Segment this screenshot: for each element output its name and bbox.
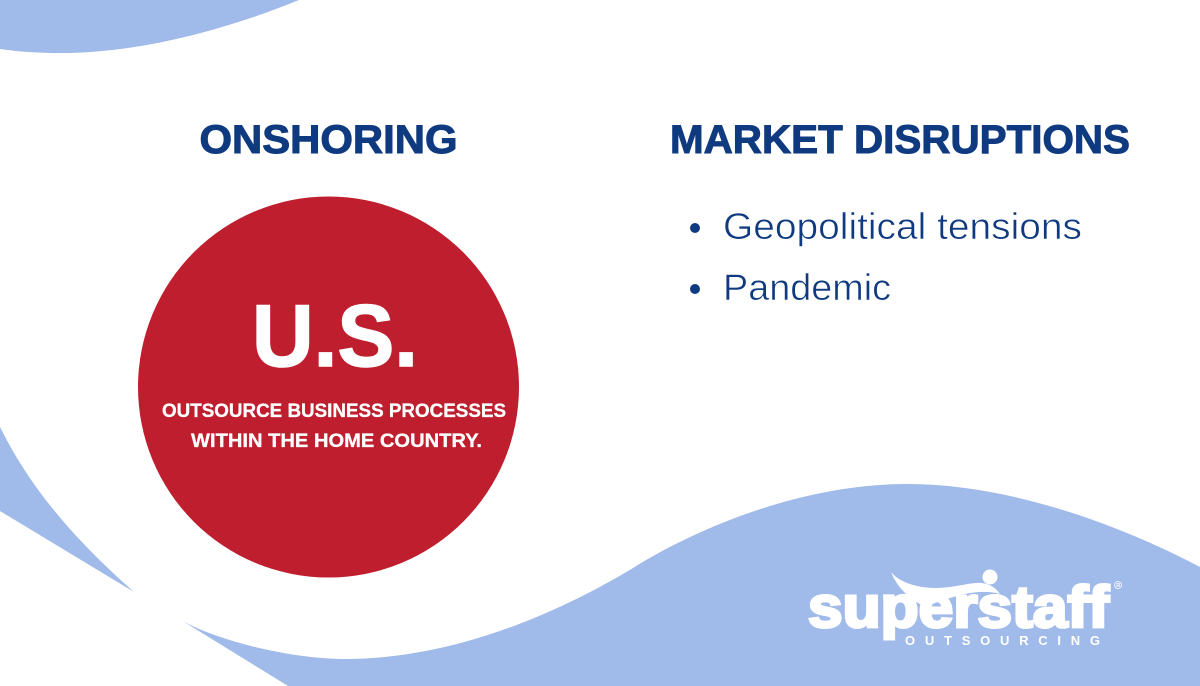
heading: onshoring: ONSHORING [200,118,458,162]
logo: superstaff outsourcing [808,570,1122,648]
bullet item: geopolitical tensions: Geopolitical tensions [723,206,1082,247]
logo registered mark: R [1116,583,1120,589]
circle text line 2: WITHIN THE HOME COUNTRY. [191,430,482,452]
bullet list: market disruptions [690,206,1082,308]
logo wordmark: superstaff [808,575,1110,640]
circle text line 1: OUTSOURCE BUSINESS PROCESSES [162,400,506,422]
background wave: top left [0,0,299,53]
heading: market disruptions: MARKET DISRUPTIONS [670,118,1130,162]
logo swoosh [891,572,1000,607]
circle title: U.S.: U.S. [252,286,418,385]
logo subtitle: OUTSOURCING [905,633,1100,648]
red circle panel [138,196,519,578]
background wave: bottom right [181,484,1200,686]
background wave: left sliver [0,427,134,592]
logo figure head [982,570,998,584]
bullet item: pandemic: Pandemic [723,267,891,308]
logo registered mark [1114,582,1122,589]
